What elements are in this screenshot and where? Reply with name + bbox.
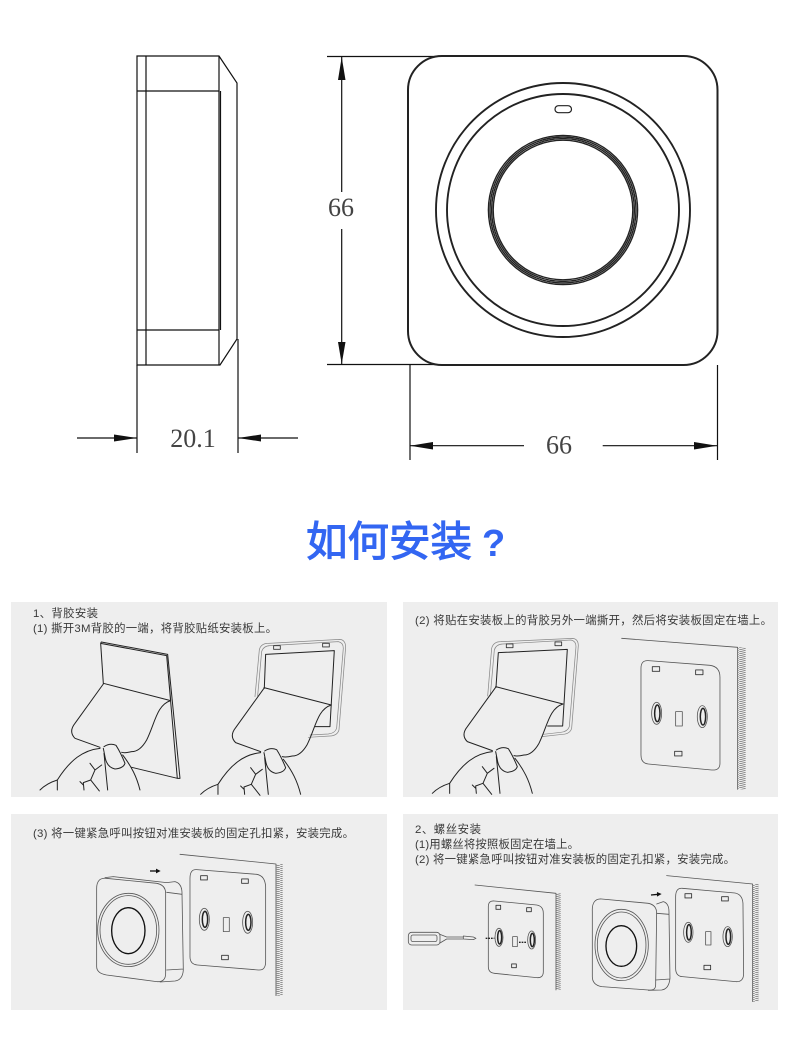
panel 3 text: (3) 将一键紧急呼叫按钮对准安装板的固定孔扣紧，安装完成。 (33, 826, 354, 840)
label: 20.1: 20.1 (170, 424, 216, 453)
panel 4 text: 2、螺丝安装 (415, 822, 481, 836)
panel 4 text: (2) 将一键紧急呼叫按钮对准安装板的固定孔扣紧，安装完成。 (415, 852, 735, 866)
side view dimension drawing (77, 56, 298, 453)
panel: step 2 peel and fix (403, 602, 778, 797)
panel 4 illustration (408, 876, 759, 1002)
height dimension 66 (327, 56, 436, 364)
panel 4 text (415, 822, 735, 866)
width dimension 66 (410, 365, 718, 460)
panel 3 illustration (97, 854, 283, 996)
title: ? (482, 523, 505, 565)
arrows: 20.1 (114, 434, 261, 442)
panel 1 text: 1、背胶安装 (33, 606, 98, 620)
panel 2 text: (2) 将贴在安装板上的背胶另外一端撕开，然后将安装板固定在墙上。 (415, 613, 772, 627)
side view body (137, 56, 237, 365)
dimension 20.1 lines (77, 339, 298, 453)
title: 如何安装 (306, 518, 472, 565)
label: 66 width: 66 (546, 430, 572, 460)
panel 1 text: (1) 撕开3M背胶的一端，将背胶贴纸安装板上。 (33, 621, 277, 635)
panel: step 4 screw install (403, 814, 778, 1010)
panel 2 illustration (432, 638, 746, 794)
label: 66 height: 66 (328, 193, 354, 222)
panel 4 text: (1)用螺丝将按照板固定在墙上。 (415, 837, 579, 851)
panel: step 1 adhesive (11, 602, 387, 797)
panel: step 3 attach button (11, 814, 387, 1010)
front view device (408, 56, 718, 365)
panel 1 illustration (40, 639, 346, 795)
panel 1 text (33, 606, 277, 635)
